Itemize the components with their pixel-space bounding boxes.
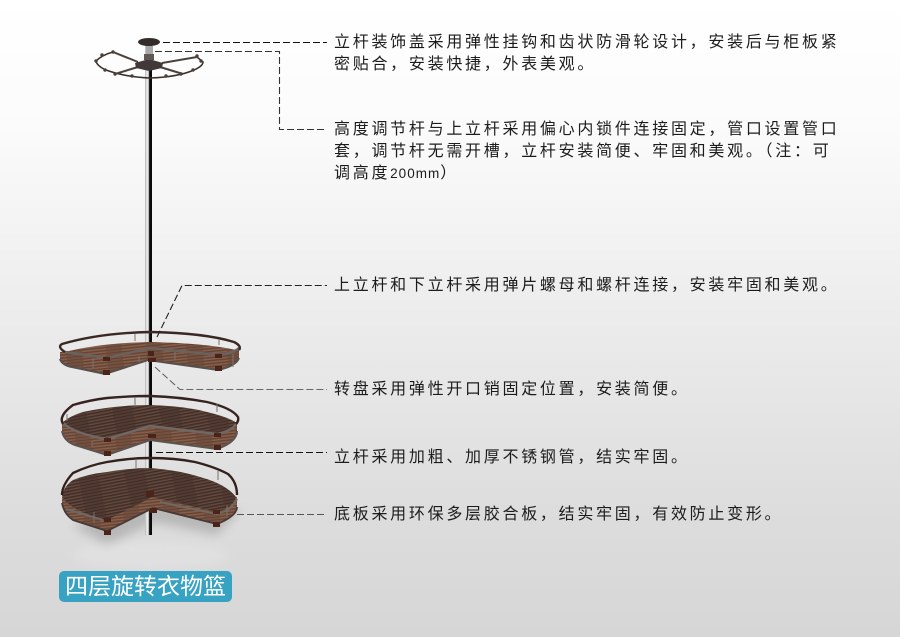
top cap [138,38,160,46]
leader: turntable pin [155,367,327,390]
text: height rod: 调高度200mm） [334,165,459,182]
text: pole: 立杆采用加粗、加厚不锈钢管，结实牢固。 [334,449,690,466]
hook ring [96,52,203,78]
hub [135,59,163,71]
leader: base board [237,514,327,516]
leader: cap cover [163,42,327,44]
text: cap cover [334,33,839,73]
front rail [63,423,237,439]
hooks [94,50,203,78]
back rail [60,332,240,352]
basket tier 2 [62,396,238,456]
basket shadow [72,505,240,545]
text: height rod [334,120,839,182]
text: cap cover: 密贴合，安装快捷，外表美观。 [334,56,596,73]
leader lines [155,42,327,514]
back rail [62,396,238,424]
text: base board: 底板采用环保多层胶合板，结实牢固，有效防止变形。 [334,506,783,523]
leader: height rod [155,52,327,130]
front rail [66,499,237,520]
centre pole [145,45,152,535]
leader: rod joint [157,286,327,337]
text: height rod: 套，调节杆无需开槽，立杆安装简便、牢固和美观。（注：可 [334,143,831,160]
text: turntable pin: 转盘采用弹性开口销固定位置，安装简便。 [334,381,690,398]
floor reflection [72,542,228,570]
text: height rod: 高度调节杆与上立杆采用偏心内锁件连接固定，管口设置管口 [334,121,839,138]
text: cap cover: 立杆装饰盖采用弹性挂钩和齿状防滑轮设计，安装后与柜板紧 [334,34,839,51]
basket tier 1 [60,332,240,375]
leader: pole [156,452,327,454]
back rail [62,458,237,495]
basket tier 3 [62,458,237,535]
text: rod joint: 上立杆和下立杆采用弹片螺母和螺杆连接，安装牢固和美观。 [334,277,839,294]
front rail [65,348,239,358]
title tag: 四层旋转衣物篮 [65,573,226,599]
top hanger assembly [94,38,203,78]
